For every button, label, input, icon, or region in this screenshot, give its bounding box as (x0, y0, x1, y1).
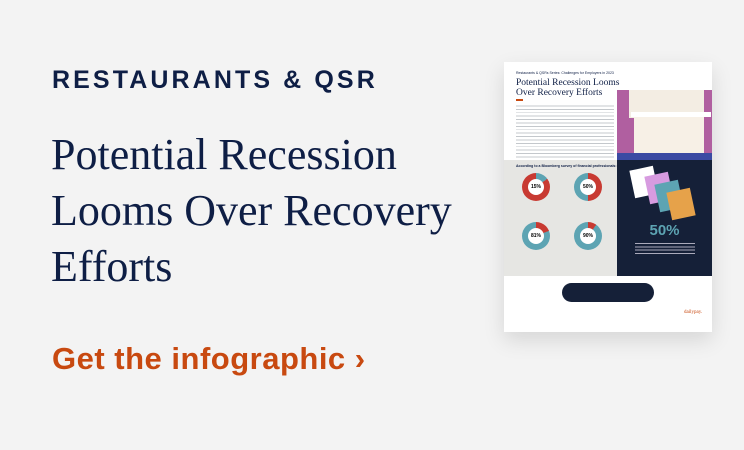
thumb pill button (562, 283, 654, 302)
donuts: 15% (531, 184, 541, 190)
thumb intro text (516, 104, 614, 159)
donuts (522, 173, 550, 201)
thumb dark panel (617, 160, 712, 276)
thumb stats panel: 81% (531, 233, 541, 239)
thumb illustration: counter (617, 90, 712, 160)
thumb title: Over Recovery Efforts (516, 88, 602, 98)
thumb stats panel: 90% (583, 233, 593, 239)
eyebrow heading: RESTAURANTS & QSR (52, 66, 378, 94)
thumb stats panel: According to a Bloomberg survey of financial professionals: (516, 164, 617, 168)
thumb title: Restaurants & QSRs Series: Challenges for Employers in 2023 (516, 71, 614, 75)
main title (51, 130, 452, 291)
thumb stats panel: 50% (583, 184, 593, 190)
main title: Potential Recession (51, 130, 397, 179)
infographic thumbnail: dailypay. (684, 310, 702, 315)
thumb dark panel: 50% (649, 222, 680, 239)
main title: Looms Over Recovery (51, 186, 452, 235)
thumb stats panel (504, 160, 617, 276)
thumb title (516, 71, 620, 98)
infographic thumbnail (504, 62, 712, 332)
main title: Efforts (51, 242, 172, 291)
call to action link: Get the infographic › (52, 341, 366, 376)
thumb title: Potential Recession Looms (516, 78, 619, 88)
